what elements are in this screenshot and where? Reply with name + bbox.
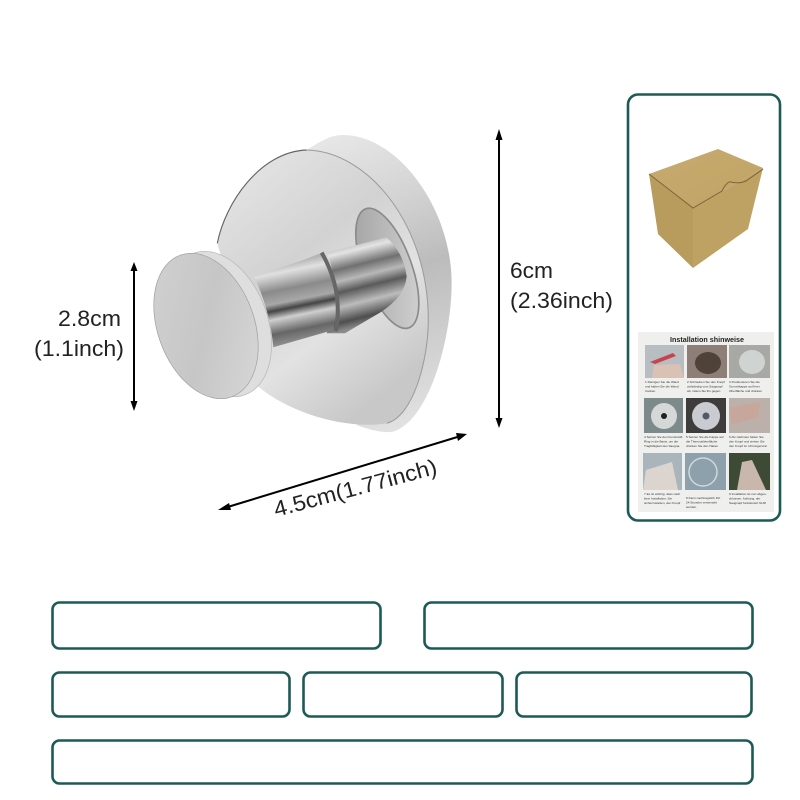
- step captions: Ring in die Basis, um die: [644, 440, 678, 444]
- icon: cardboard box: [649, 149, 763, 268]
- step captions: die Thermoklebefläche: [686, 440, 718, 444]
- step captions: ab, indem Sie ihn gegen: [687, 389, 721, 393]
- step captions: 8 Kann nachtragslich Ihrt: [686, 496, 720, 500]
- step captions: 3 Positionieren Sie die: [729, 380, 760, 384]
- step captions: 2 Schrauben Sie den Knopf: [687, 380, 725, 384]
- hook head rim: [148, 237, 291, 411]
- step captions: 1 Reinigen Sie die Wand: [645, 380, 679, 384]
- hook base plate side: [307, 135, 452, 432]
- step captions: Tragfähigkeit des Saugna-: [644, 444, 680, 448]
- step captions: drücken Sie den Haken: [686, 444, 718, 448]
- empty label box 1: [52, 602, 380, 648]
- step captions: sicherzustellen, den Knopf: [644, 501, 680, 505]
- step captions: 7 Es ist wichtig, dass nach: [644, 492, 681, 496]
- step captions: Oberfläche und drücken: [729, 389, 762, 393]
- step captions: den Knopf im Uhrzeigersinn: [729, 444, 767, 448]
- installation manual sheet: [638, 332, 774, 512]
- manual title: Installation shinweise: [670, 335, 744, 344]
- step captions: 24 Stunden verwendet: [686, 500, 717, 504]
- step captions: [644, 380, 767, 509]
- label: 2.8cm: 2.8cm: [58, 306, 121, 331]
- step captions: trocken.: [645, 389, 656, 393]
- hook stem collar: [322, 253, 338, 331]
- empty label box 2: [424, 602, 752, 648]
- arrow: plate height: [496, 129, 502, 428]
- hook head face: [135, 239, 277, 413]
- step captions: vollständig vom Saugnapf: [687, 384, 723, 388]
- label: 1.1inch: (1.1inch): [34, 336, 124, 361]
- hook plate right edge: [307, 150, 428, 423]
- step captions: den Knopf und ziehen Sie: [729, 440, 765, 444]
- arrow: depth: [218, 433, 467, 510]
- hook base plate face: [217, 150, 428, 425]
- empty label box 5: [516, 672, 752, 716]
- step captions: Gummikappe auf Ihrer: [729, 384, 760, 388]
- step photos: [643, 345, 770, 490]
- product photo: chrome robe hook: [135, 135, 452, 432]
- label: 2.36inch: (2.36inch): [510, 288, 613, 313]
- empty label box 3: [52, 672, 290, 716]
- panel: package contents: [628, 94, 780, 520]
- step captions: 9 Installation ist nun abges-: [729, 492, 767, 496]
- empty label box 6: [52, 740, 752, 784]
- step captions: ihrer Installation, Sie: [644, 496, 672, 500]
- step captions: 6 Als nächstes halten Sie: [729, 435, 764, 439]
- step captions: und halten Sie die Wand: [645, 384, 679, 388]
- label: 6cm: 6cm: [510, 258, 553, 283]
- hook plate dark edge: [217, 150, 307, 243]
- step captions: Saugnapf funktioniert NUR: [729, 501, 767, 505]
- hook stem outer segment: [327, 237, 407, 333]
- step captions: werden.: [686, 505, 697, 509]
- hook stem inner segment: [254, 253, 336, 347]
- hook base recess: [343, 200, 432, 336]
- label: 4.5cm 1.77inch: 4.5cm(1.77inch): [271, 454, 440, 522]
- step captions: 5 Setzen Sie die Kappe auf: [686, 435, 724, 439]
- step captions: 4 Setzen Sie den Kunststoff-: [644, 435, 683, 439]
- arrow: hook head height: [130, 262, 138, 411]
- step captions: chlossen. Achtung, der: [729, 496, 760, 500]
- empty label box 4: [304, 672, 502, 716]
